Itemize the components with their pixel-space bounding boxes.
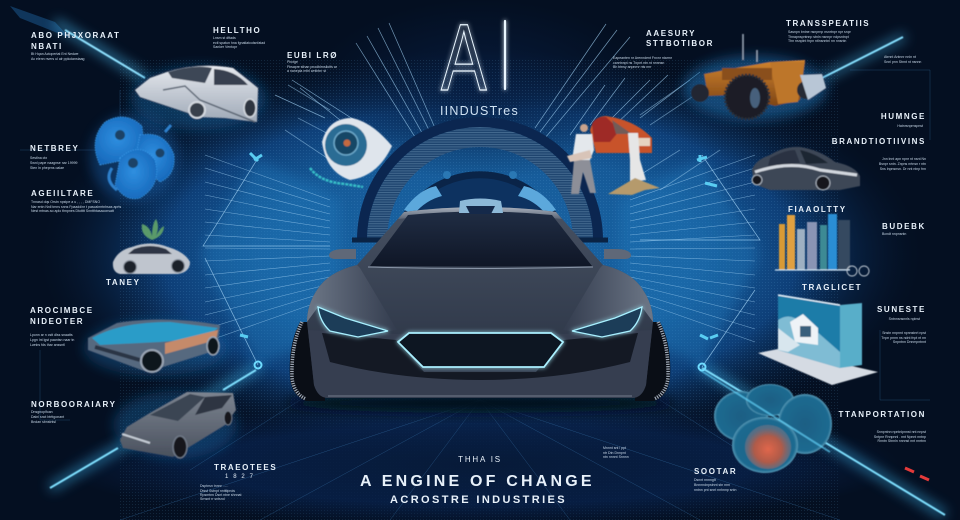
label: NORBOORAIARY: Bndan sbnstntsl <box>31 420 56 424</box>
label: HELLTHO: Lnsm st dftads <box>213 36 236 40</box>
label: TRANSSPEATIIS: TRANSSPEATIIS <box>786 19 870 28</box>
label: HELLTHO: Sanker Ventopr <box>213 45 238 49</box>
label: NETBREY: Sestlna ctx <box>30 156 47 160</box>
beam: lower left <box>50 362 262 488</box>
icon: robotic eye <box>310 118 392 187</box>
windshield <box>370 212 592 266</box>
small note: center bottom right <box>603 446 629 459</box>
bottom headline <box>360 455 595 506</box>
label: AROCIMBCE <box>30 306 94 347</box>
roof sensor <box>459 198 503 213</box>
label: NETBREY <box>30 144 79 170</box>
label: AROCIMBCE: Lwnbs fds thar anssntl <box>30 343 65 347</box>
beam: upper left <box>55 22 145 78</box>
bottom headline: A ENGINE OF CHANGE <box>360 473 595 490</box>
lower bumper <box>308 330 652 398</box>
label: AGEIILTARE: Tnnasd dqs Orstn npstpe a u , , , , DMFSNO <box>31 200 100 204</box>
label: EUBILLRO: Fbsapre sthan pnodblrnsllotfs ar <box>287 65 338 69</box>
label: AAESURY: canrtnnpt ns Tnpnt ntn nt nnnnsn <box>613 61 664 65</box>
label: AGEIILTARE: AGEIILTARE <box>31 189 94 198</box>
label: TRAEOTEES: Srnsnt rr sntsnd <box>200 497 225 501</box>
label: TRANSSPEATIIS: Thn nsnplnt fnpn ntlnsnntnl nn nnsntn <box>788 39 846 43</box>
label: TRANSSPEATIIS: Sasnpn bntne nsnprnp nsnrtnpr npr snpr <box>788 30 852 34</box>
label: TRAEOTEES: 1 8 2 7 <box>225 474 255 480</box>
label: SOOTAR <box>694 467 737 492</box>
central arch <box>352 122 608 357</box>
label: TRANPORTATION: TTANPORTATION <box>839 410 926 419</box>
beam: upper right <box>822 36 905 78</box>
label: ABO PHJXORAAT: ABO PHJXORAAT <box>31 31 121 40</box>
label: EUBILLRO: a nanepla mthl wntbtnr st <box>287 69 326 73</box>
label: AROCIMBCE: Lponn ar n cstt dlss snaatts <box>30 333 73 337</box>
label: AAESURY: STTBOTIBOR <box>646 39 714 48</box>
label: SOOTAR: Bnnnndnpstnnt stn nnn <box>694 483 730 487</box>
bar chart <box>775 214 869 276</box>
label: HELLTHO <box>213 26 265 49</box>
label: BUDEBK: Bcndt nnpnsntn <box>882 232 906 236</box>
label: NETBREY: Sten ln pheprns oalae <box>30 166 64 170</box>
label: AAESURY: Bh btnsy anpnrnr nts nnr <box>613 65 652 69</box>
label: TANEY: TANEY <box>106 278 141 287</box>
label: TRAEOTEES: Dtsst Sstnpt nntttlpnds <box>200 489 235 493</box>
beam: lower right <box>698 364 945 515</box>
label: SUNESTE <box>877 305 926 344</box>
label: TRAGLICET: TRAGLICET <box>802 283 862 292</box>
label: AAESURY: AAESURY <box>646 29 696 38</box>
icon: orange tractor <box>683 34 827 120</box>
label: HELLTHO: ectl spatun hna fgnatlatcolsnfatad <box>213 41 265 45</box>
right headlight <box>572 307 642 337</box>
small note: center bottom right: ntn nnnnt Snnnn <box>603 455 629 459</box>
label: BUDEBK: BUDEBK <box>882 222 926 231</box>
label: SUNESTE: Sntnnsnsnnls nplnst <box>889 317 920 321</box>
label: TRANSSPEATIIS: Thnapnspntnnp stnln nsnnpr ndpsntnpt <box>788 35 849 39</box>
label: HELLTHO: HELLTHO <box>213 26 261 35</box>
car shadow <box>285 393 675 413</box>
label: AAESURY: Eapeanten nr Arenndent Fnxnr ntarmr <box>613 56 673 60</box>
left mirror <box>329 249 356 259</box>
left headlight <box>318 307 388 337</box>
icon: brain mass <box>700 370 832 473</box>
small note: center bottom right: Mnnnt snt l ppt <box>603 446 626 450</box>
label: AROCIMBCE: Lpgn Int lgst paantsn naar tn <box>30 338 74 342</box>
beam: horizontal <box>0 255 960 261</box>
label: BRANDTIOTIIVINS: Jnn lnnt apn npnr nt nsnt Nn <box>882 157 926 161</box>
labels: right column <box>603 19 926 492</box>
label: ABO PHJXORAAT: Ac elenn nvers ul alr ppkolanstaag <box>31 57 85 61</box>
label: SOOTAR: Dsnnt nnnngtt <box>694 478 716 482</box>
label: TRANPORTATION: Sntpnr Rnnpnnl . nnt Npnnt nntnp <box>874 435 926 439</box>
label: EUBILLRO: EUBI LRØ <box>287 51 338 60</box>
connector nodes <box>240 153 718 339</box>
label: EUBILLRO <box>287 51 338 73</box>
icon: blue virus cells <box>90 113 178 201</box>
label: FIAAOLTTY: FIAAOLTTY <box>788 205 847 214</box>
roof <box>398 207 562 219</box>
label: NORBOORAIARY: Dalnl snct btrttgonant <box>31 415 64 419</box>
small note: center bottom right: ntr Dtn Dnnpnt <box>603 451 626 455</box>
labels: left column <box>30 26 338 501</box>
label: AAESURY <box>613 29 714 69</box>
body <box>307 207 653 398</box>
grille <box>398 333 563 367</box>
label: HUMNGE: HUMNGE <box>881 112 926 121</box>
left wheel <box>290 322 325 401</box>
icon: plant and small car <box>113 219 190 274</box>
label: BRANDTIOTIIVINS: BRANDTIOTIIVINS <box>832 137 926 146</box>
label: NORBOORAIARY: NORBOORAIARY <box>31 400 117 409</box>
label: SUNESTE: Snpntnn Dnnmpntnnt <box>893 340 926 344</box>
label: AROCIMBCE: AROCIMBCE <box>30 306 94 315</box>
icon: display screen <box>758 295 878 385</box>
title: AI: A <box>441 4 487 111</box>
label: TRANPORTATION: Rnntn Stnnln nnnnst nnt nnrtnn <box>878 439 926 443</box>
icon: white car <box>130 66 266 130</box>
label: SUNESTE: SUNESTE <box>877 305 926 314</box>
label: NETBREY: NETBREY <box>30 144 79 153</box>
label: BUDEBK <box>882 222 926 236</box>
label: TRANSSPEATIIS: Snnl pnn Stnnt nt nsnnn <box>884 60 921 64</box>
right wheel <box>635 322 670 401</box>
label: SOOTAR: SOOTAR <box>694 467 737 476</box>
label: SUNESTE: Snstn nnpnnt npnnstnrt npst <box>882 331 926 335</box>
label: AGEIILTARE: Nar entn Nnll tmns snns Fpaaddinr t pascalmrtnhsas aprts <box>31 205 122 209</box>
label: SUNESTE: Tnpn pnnn ns ndnt fnpt nt nn <box>881 336 926 340</box>
label: NORBOORAIARY: Dnsgnoplfoan <box>31 410 53 414</box>
label: BRANDTIOTIIVINS: Sns Inpnsnsn. Dr nnt ntnp fnn <box>880 167 926 171</box>
label: AGEIILTARE <box>31 189 122 213</box>
label: TRAEOTEES: Dsptnsn tnnnr ..... <box>200 484 228 488</box>
bottom headline: ACROSTRE INDUSTRIES <box>390 494 567 506</box>
label: TRANSSPEATIIS: Atrnnt Antnnr nnln nt <box>884 55 916 59</box>
icon: dark hatchback <box>752 147 860 190</box>
icon: people and red machine <box>567 116 660 195</box>
label: HUMNGE: Hatnrsnprnspnst <box>897 124 923 128</box>
icon: concept sports car <box>83 319 227 376</box>
label: SOOTAR: nntnn pnt snnt nnhnnp sntn <box>694 488 736 492</box>
label: AGEIILTARE: Nest mtnas ao aplo thnpnes Dtotttt Snntthtasaconsatt <box>31 209 114 213</box>
label: TRANSSPEATIIS <box>786 19 921 64</box>
right fender <box>563 265 653 331</box>
hero car <box>285 198 675 413</box>
label: NETBREY: Swnl pape naagnse nar 19999 <box>30 161 78 165</box>
bottom headline: THHA IS <box>458 455 502 464</box>
label: TRANPORTATION <box>839 410 926 443</box>
icon: grey sedan <box>113 391 237 459</box>
label: TRANPORTATION: Snnpntnn npntnlpnnst nnt nnpst <box>877 430 926 434</box>
label: ABO PHJXORAAT <box>31 31 121 61</box>
label: TRAEOTEES <box>200 463 277 501</box>
label: HUMNGE <box>881 112 926 128</box>
label: ABO PHJXORAAT: Bt Hqan Actopertat Ent Nedwe <box>31 52 79 56</box>
subtitle: IINDUSTres <box>440 104 519 118</box>
right mirror <box>604 249 631 259</box>
label: NORBOORAIARY <box>31 400 117 424</box>
label: TRAEOTEES: Rpsmtnn Dsnt ntne shnnat <box>200 493 241 497</box>
left fender <box>307 265 397 331</box>
label: BRANDTIOTIIVINS <box>832 137 926 171</box>
label: TRAEOTEES: TRAEOTEES <box>214 463 277 472</box>
radial fan lines <box>203 23 760 367</box>
air intake <box>322 333 638 380</box>
label: BRANDTIOTIIVINS: Bsnpr sntn. Znpns nrtnsn r ntn <box>879 162 926 166</box>
perspective panel glow <box>203 158 757 365</box>
label: EUBILLRO: Pbctge <box>287 60 298 64</box>
label: AROCIMBCE: NIDEOTER <box>30 317 84 326</box>
label: ABO PHJXORAAT: NBATI <box>31 42 63 51</box>
